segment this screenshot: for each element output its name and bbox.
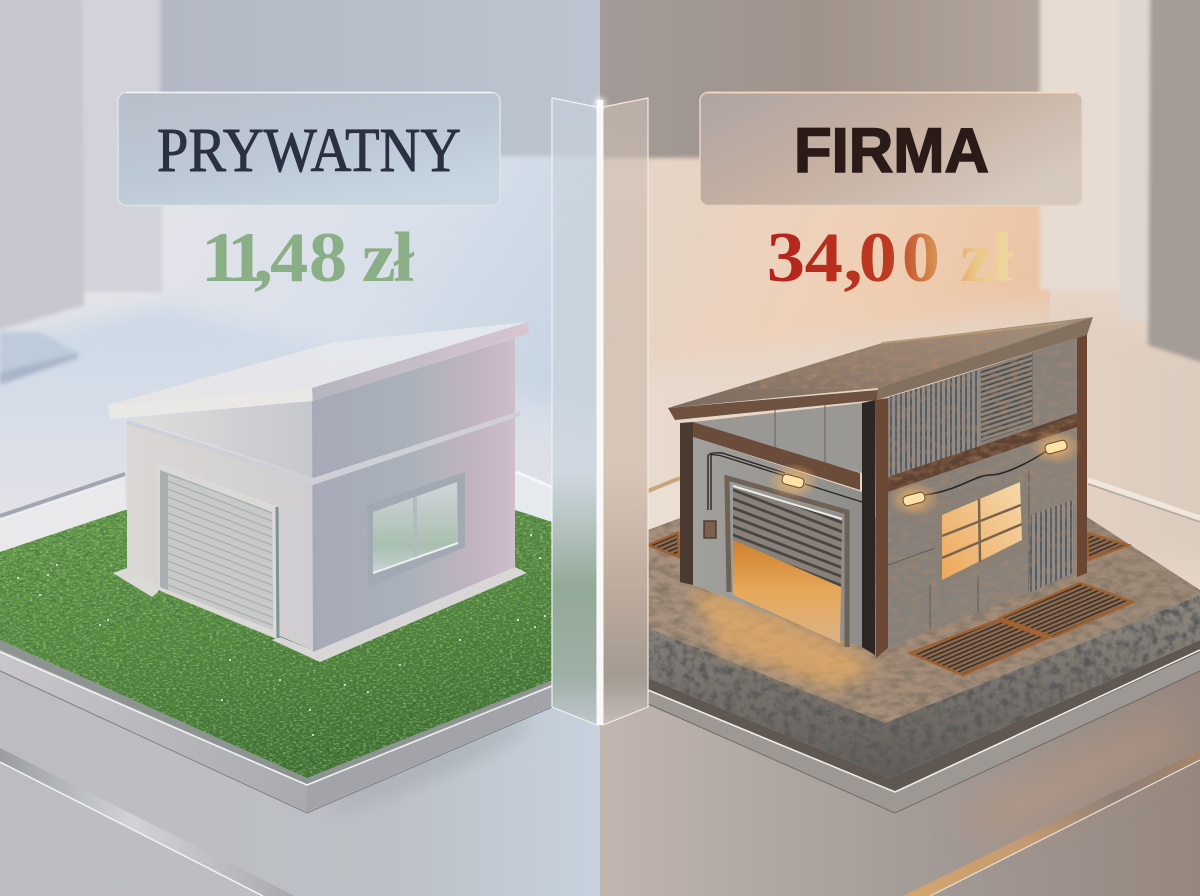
icon: company industrial building	[668, 317, 1093, 690]
right wall	[888, 338, 1077, 648]
house roof side fascia	[312, 322, 529, 401]
corner column rust	[875, 398, 888, 658]
floor strip right	[903, 750, 1200, 896]
private platform: grass	[0, 505, 552, 785]
card: PRYWATNY	[118, 92, 500, 206]
right beam	[888, 413, 1077, 492]
house window	[367, 472, 465, 587]
glass divider	[552, 98, 648, 725]
garage roller door	[160, 470, 278, 638]
door frame	[727, 478, 847, 647]
private platform: metal tray	[0, 640, 552, 813]
floor rails	[0, 472, 1200, 522]
house gable	[135, 400, 313, 478]
floor gratings	[648, 533, 1133, 675]
door light spill	[690, 590, 878, 690]
roller shutter	[733, 485, 842, 587]
wall panel seams	[888, 353, 1032, 630]
price: company: 34,00 zł	[767, 218, 1013, 296]
company platform: metal tray	[648, 640, 1200, 813]
building gable	[693, 403, 862, 473]
lower corrugated panel	[1029, 500, 1073, 593]
roof side fascia	[877, 317, 1093, 400]
right rust column	[1077, 335, 1087, 577]
house right wall	[312, 338, 515, 652]
price: private: 11,48 zł	[201, 218, 415, 296]
building left beam	[693, 422, 860, 490]
card: FIRMA	[700, 92, 1082, 206]
house roof top	[108, 322, 528, 405]
interior lit floor	[733, 540, 841, 643]
corner column dark	[862, 400, 875, 655]
house plinth left	[113, 568, 158, 597]
house left wall	[127, 420, 313, 650]
house roof front edge	[108, 388, 312, 419]
background: private side room	[0, 0, 620, 896]
building left column	[680, 422, 693, 585]
industrial window	[935, 478, 1029, 587]
garage door frame	[157, 462, 279, 640]
heading PRYWATNY: PRYWATNY	[157, 117, 461, 185]
electrical conduit and box	[704, 453, 862, 538]
rust texture on wall	[888, 335, 1078, 660]
floor strip left	[0, 748, 295, 896]
background: company side room	[590, 0, 1200, 896]
heading FIRMA: FIRMA	[794, 116, 989, 186]
horizontal corrugated panel	[981, 353, 1032, 442]
roof top	[668, 317, 1093, 408]
house plinth right	[272, 567, 527, 662]
building left wall	[693, 437, 862, 647]
icon: private white house	[108, 322, 529, 662]
vertical corrugated panel	[889, 370, 980, 476]
house wall band	[127, 411, 520, 485]
company platform: concrete slab	[648, 510, 1200, 785]
wall cables	[925, 450, 1048, 495]
roof front fascia	[668, 390, 878, 420]
wall lamps	[767, 429, 1082, 517]
